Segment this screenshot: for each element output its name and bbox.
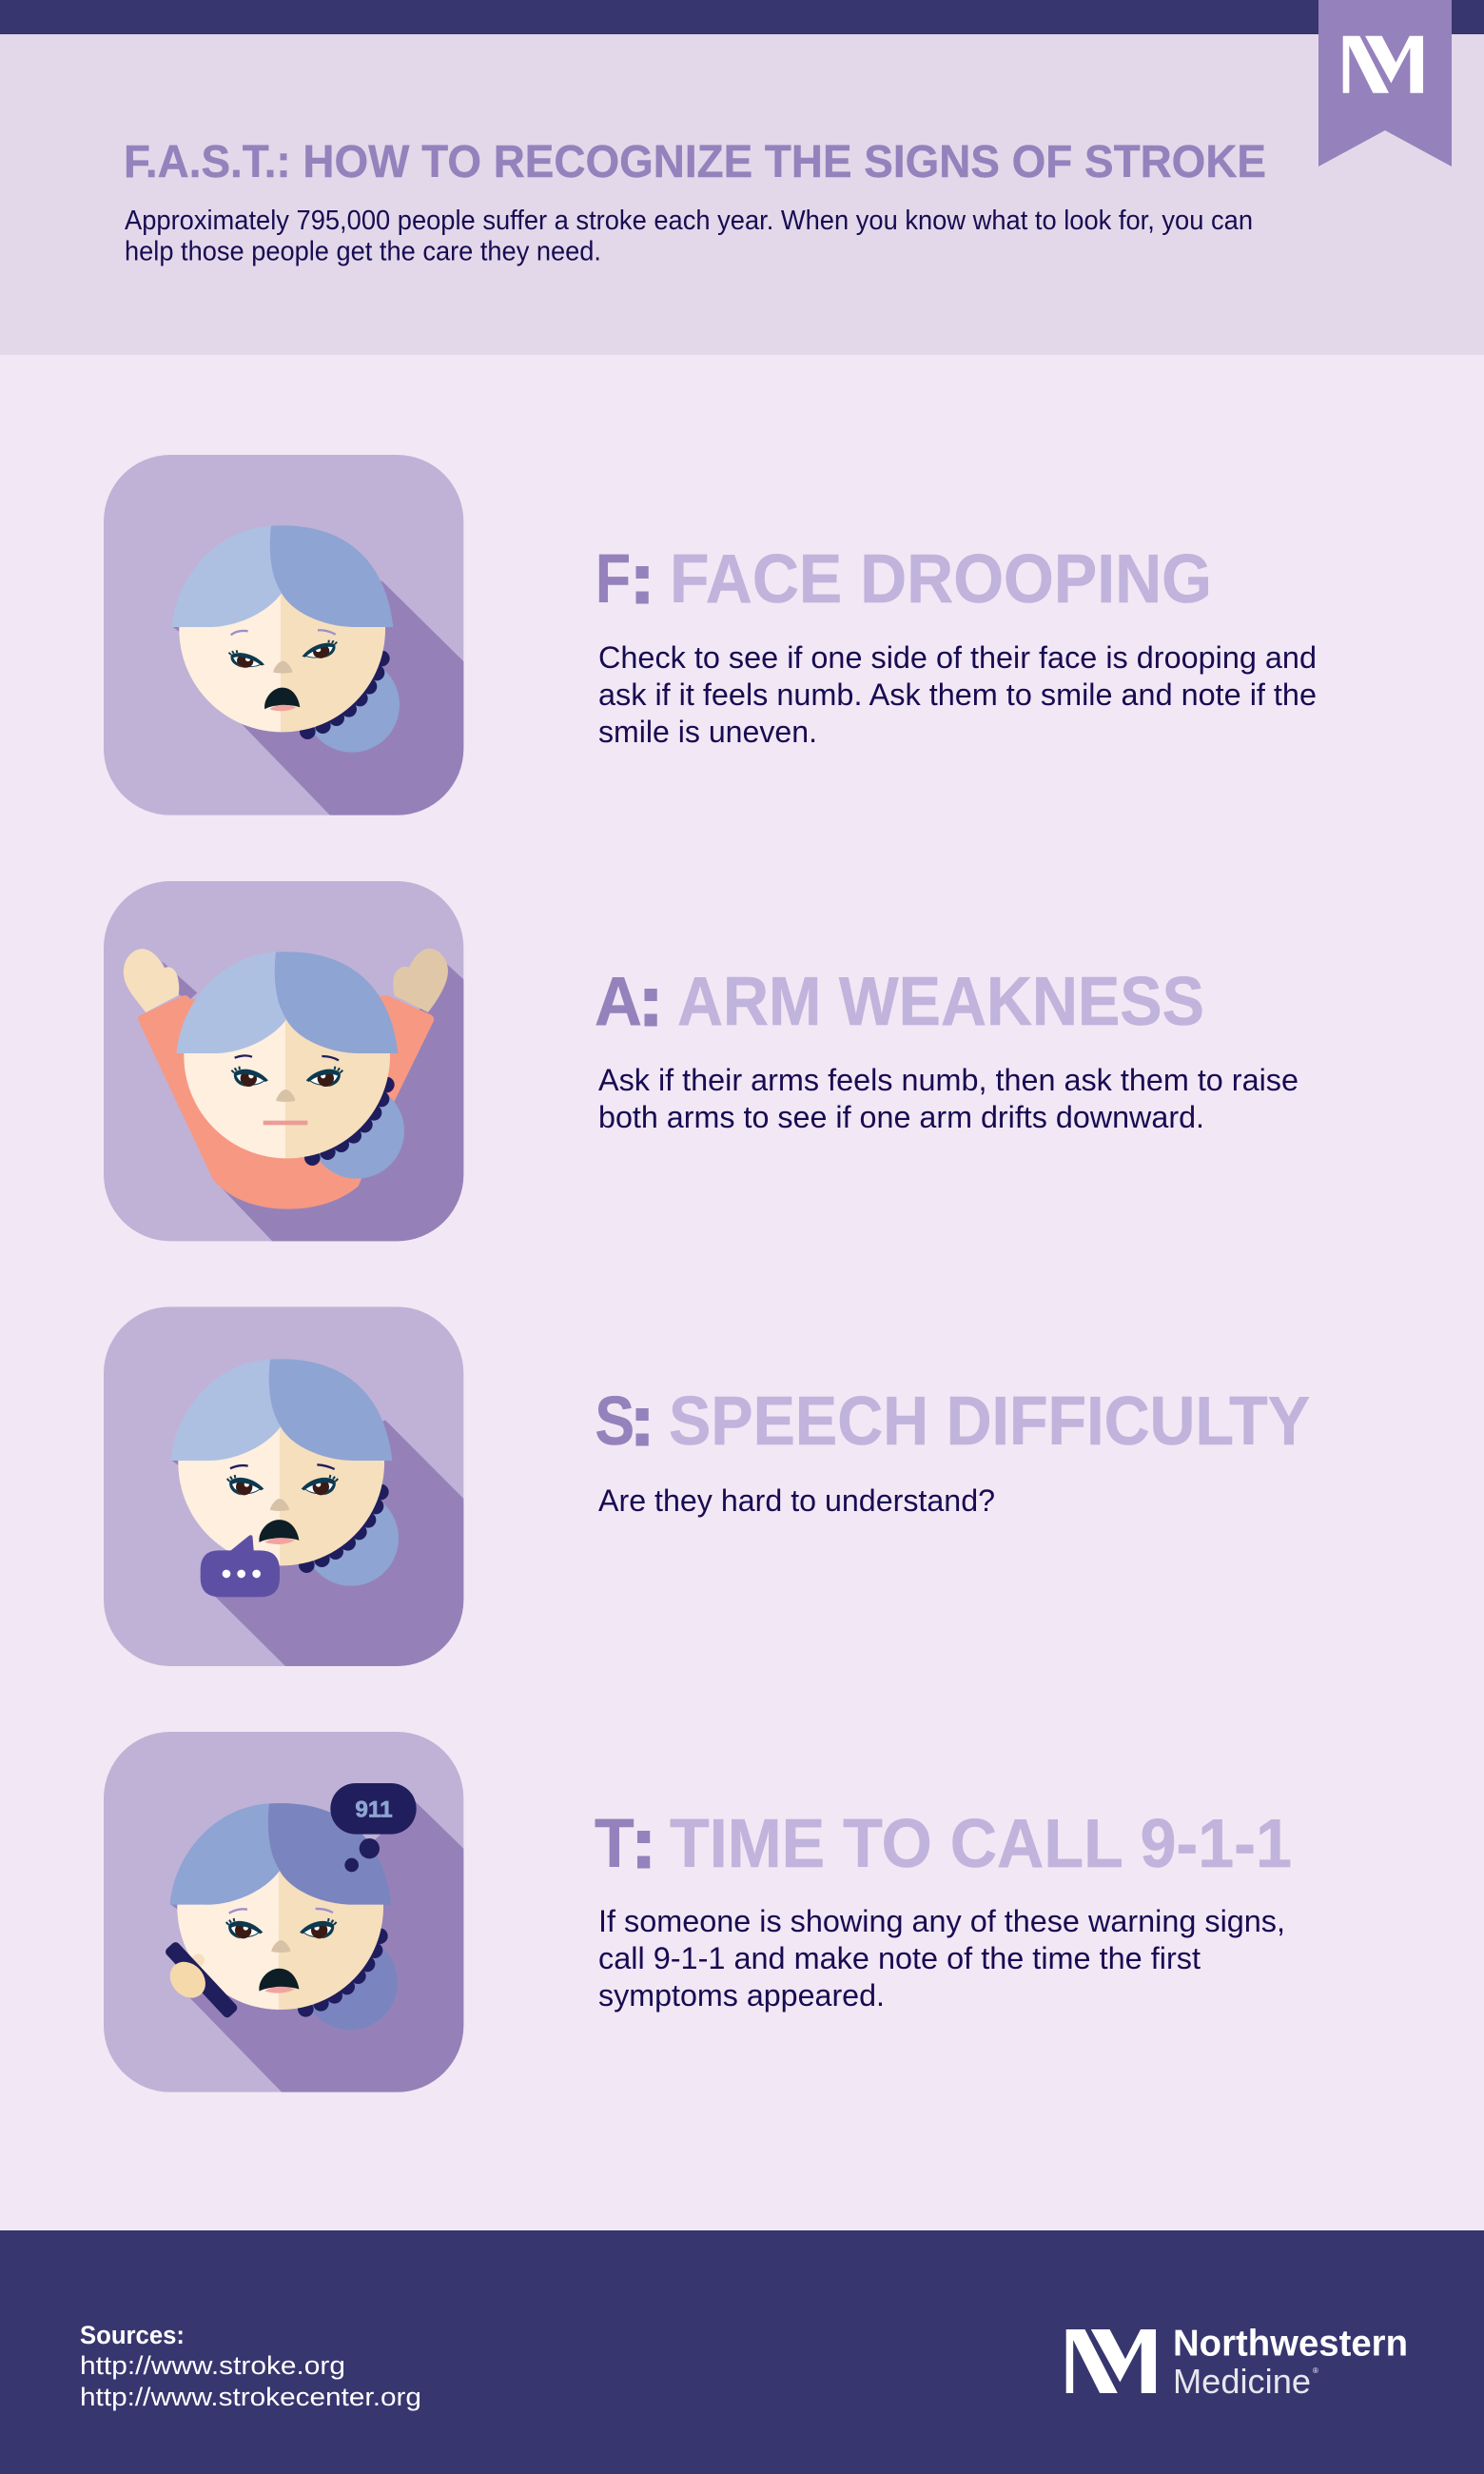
heading: face drooping: F [596, 540, 631, 618]
head [177, 952, 404, 1179]
ribbon logo [1318, 0, 1452, 167]
text: arm weakness: Ask if their arms feels numb, then ask them to raise [598, 1063, 1298, 1097]
text: face drooping [598, 640, 1317, 749]
text: arm weakness [598, 1063, 1298, 1134]
hand right [393, 949, 448, 1012]
panel: speech difficulty icon [104, 1306, 466, 1670]
panel: face drooping icon [104, 455, 466, 818]
heading: time to call: : [632, 1805, 655, 1882]
icon background [104, 881, 463, 1241]
long shadow [187, 1801, 466, 2096]
heading: arm weakness: A [595, 963, 642, 1040]
Northwestern Medicine logo: Medicine [1173, 2362, 1311, 2401]
head [171, 1359, 399, 1586]
thought bubble 911 [330, 1783, 417, 1872]
thought bubble 911: 911 [355, 1797, 393, 1822]
heading: speech difficulty: S [595, 1383, 635, 1460]
sources: Sources: [80, 2321, 185, 2349]
text: face drooping: Check to see if one side of their face is drooping and [598, 640, 1317, 675]
sources: http://www.strokecenter.org [80, 2383, 421, 2411]
long shadow [212, 1420, 466, 1670]
text: time to call: call 9-1-1 and make note of the time the first [598, 1941, 1201, 1975]
Northwestern Medicine logo: Northwestern [1173, 2324, 1408, 2364]
heading: face drooping: FACE DROOPING [670, 540, 1212, 618]
Northwestern Medicine logo: ® [1313, 2366, 1318, 2375]
heading: speech difficulty: : [631, 1383, 654, 1460]
footer band [0, 2230, 1484, 2474]
icon background [104, 455, 463, 815]
icon background [104, 1306, 463, 1666]
text: time to call: symptoms appeared. [598, 1978, 885, 2013]
text: face drooping: smile is uneven. [598, 715, 817, 749]
sources [80, 2321, 421, 2411]
text: face drooping: ask if it feels numb. Ask them to smile and note if the [598, 677, 1317, 712]
text: time to call: If someone is showing any of these warning signs, [598, 1904, 1285, 1938]
icon background [104, 1732, 463, 2092]
face features [226, 1909, 337, 1993]
face features [227, 630, 340, 711]
heading: arm weakness: : [639, 963, 662, 1040]
intro text: help those people get the care they need. [125, 236, 601, 266]
heading: time to call: T [595, 1805, 635, 1882]
speech bubble [201, 1535, 280, 1597]
head [170, 1803, 398, 2030]
heading: time to call: TIME TO CALL 9-1-1 [670, 1805, 1292, 1882]
title: F.A.S.T.: HOW TO RECOGNIZE THE SIGNS OF STROKE [124, 137, 1266, 187]
Northwestern Medicine logo [1066, 2324, 1408, 2401]
header band [0, 0, 1484, 355]
intro text: Approximately 795,000 people suffer a stroke each year. When you know what to look for, you can [125, 206, 1253, 236]
long shadow [235, 580, 466, 818]
heading: arm weakness: ARM WEAKNESS [677, 963, 1204, 1040]
face features [227, 1464, 338, 1544]
sources: http://www.stroke.org [80, 2351, 345, 2380]
text: arm weakness: both arms to see if one arm drifts downward. [598, 1100, 1204, 1134]
text: speech difficulty: Are they hard to understand? [598, 1483, 995, 1518]
heading: face drooping: : [631, 540, 654, 618]
intro text [125, 206, 1253, 266]
text: time to call [598, 1904, 1285, 2013]
hand left [124, 949, 179, 1012]
sweater and arms [138, 995, 434, 1209]
head [172, 525, 400, 753]
heading: speech difficulty: SPEECH DIFFICULTY [669, 1383, 1310, 1460]
panel: time to call icon [104, 1732, 466, 2096]
panel: arm weakness icon [104, 881, 466, 1245]
long shadow [162, 961, 466, 1245]
face features [231, 1055, 342, 1125]
phone and hand [163, 1940, 239, 2019]
